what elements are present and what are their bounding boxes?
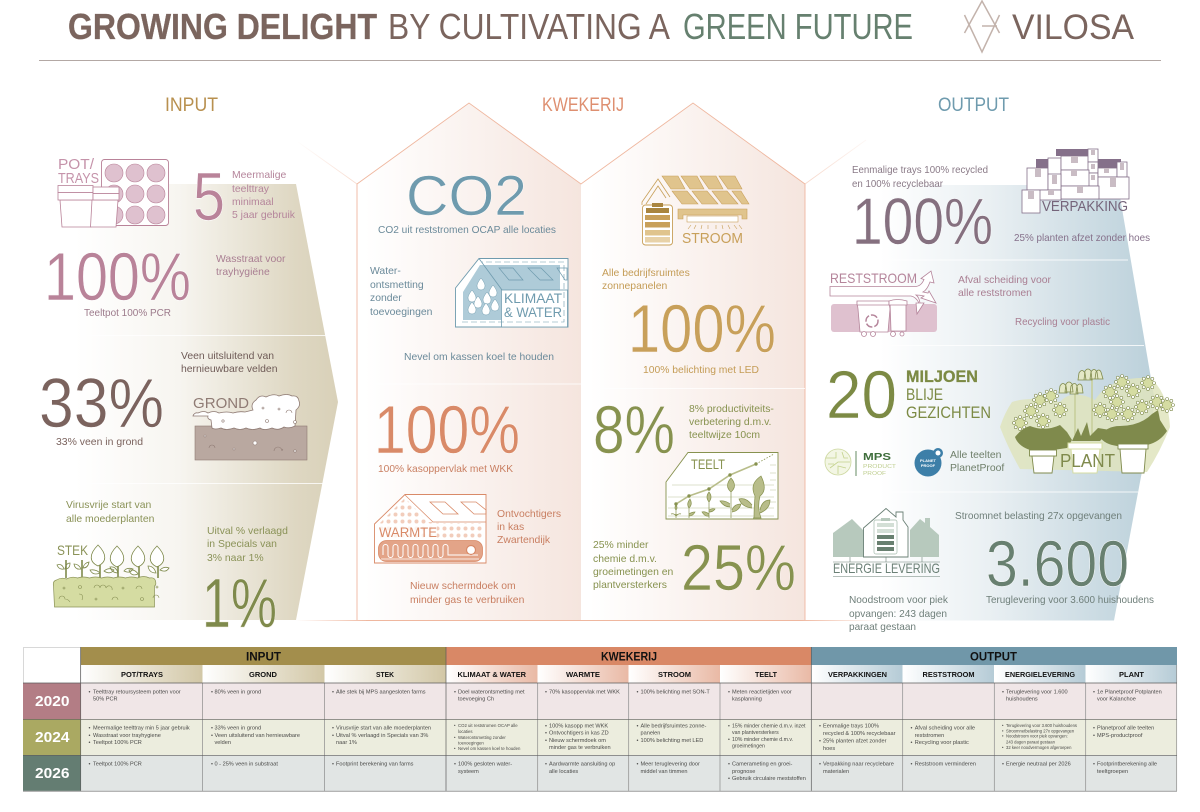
- cells: 2020: Doel waterontsmetting met: [458, 690, 525, 696]
- icon: verpakking: VERPAKKING: [1042, 199, 1128, 215]
- icon: reststroom: [830, 270, 937, 336]
- column headers: VERPAKKINGEN: [828, 670, 887, 679]
- cells: 2024: [88, 723, 1154, 752]
- text: meermalige teelttray: Meermalige: [232, 170, 287, 181]
- text: kasoppervlak: 100% kasoppervlak met WKK: [378, 464, 513, 475]
- cells: 2026: Verpakking naar recyclebare: [823, 762, 894, 768]
- cells: 2026: Footprintberekening alle: [1097, 762, 1157, 768]
- cells: 2026: teeltgroepen: [1097, 769, 1128, 775]
- cells: 2020: 80% veen in grond: [214, 690, 261, 696]
- cells: 2026: Reststroom verminderen: [915, 762, 976, 768]
- cells: 2024: CO2 uit reststromen OCAP alle: [458, 723, 518, 728]
- header: kwekerij: KWEKERIJ: [601, 652, 657, 664]
- cells: 2024: Stroomnetbelasting 27x opgevangen: [1006, 728, 1075, 733]
- cells: 2026: •: [1093, 762, 1095, 768]
- heading: kwekerij: KWEKERIJ: [542, 95, 624, 116]
- text: ontvochtigers: in kas: [497, 522, 524, 533]
- text: meermalige teelttray: 5 jaar gebruik: [232, 210, 296, 221]
- text: nevel: Nevel om kassen koel te houden: [404, 352, 554, 363]
- stat: 8%: 8%: [593, 392, 675, 468]
- stat: 20 miljoen blije gezichten: BLIJE: [906, 385, 943, 404]
- icon: energie levering: ENERGIE LEVERING: [833, 560, 940, 576]
- cells: 2024: 25% planten afzet zonder: [823, 738, 887, 744]
- table corner cell: [24, 648, 80, 684]
- text: virusvrije start: Virusvrije start van: [66, 500, 151, 511]
- header: kwekerij: [446, 647, 812, 665]
- cells: 2020: •: [545, 690, 547, 696]
- cells: 2024: 33% veen in grond: [214, 726, 261, 732]
- text: meermalige teelttray: teelttray: [232, 184, 270, 195]
- cells: 2026: Energie neutraal per 2026: [1006, 762, 1071, 768]
- text: eenmalige trays: en 100% recyclebaar: [852, 179, 943, 190]
- cells: 2024: •: [454, 723, 456, 728]
- cells: 2024: •: [819, 723, 821, 729]
- panel: kwekerij greenhouses background: [296, 103, 880, 621]
- cells: 2024: •: [1093, 733, 1095, 739]
- cells: 2024: •: [1002, 723, 1004, 728]
- cells: 2024: •: [88, 740, 90, 746]
- cells: 2024: •: [819, 738, 821, 744]
- text: ontvochtigers: Zwartendijk: [497, 535, 551, 546]
- cells: 2026: •: [211, 762, 213, 768]
- cells: 2024: locaties: [458, 729, 473, 734]
- stat: 20 miljoen blije gezichten: [826, 357, 991, 433]
- cells: 2026: •: [728, 776, 730, 782]
- cells: 2024: Wasstraat voor trayhygiene: [93, 733, 161, 739]
- cells: 2024: •: [636, 738, 638, 744]
- header: output: OUTPUT: [970, 652, 1017, 664]
- cells: 2020: voor Kalanchoe: [1097, 697, 1136, 703]
- cells: 2026: middel van timmen: [640, 769, 687, 775]
- cells: 2024: minder gas te verbruiken: [549, 745, 611, 751]
- icon: klimaat en water: KLIMAAT: [504, 290, 562, 306]
- cells: 2024: Teruglevering voor 3.600 huishoudens: [1006, 723, 1077, 728]
- text: noodstroom: paraat gestaan: [849, 622, 916, 633]
- cells: 2024: 15% minder chemie d.m.v. inzet: [732, 723, 806, 729]
- logo: Vilosa: [964, 1, 1135, 52]
- icon: warmte: [374, 494, 486, 563]
- cells: 2026: Teeltpot 100% PCR: [93, 762, 142, 768]
- cells: 2024: Afval scheiding voor alle: [915, 726, 975, 732]
- table: roadmap: [23, 647, 1177, 791]
- cells: 2024: •: [332, 733, 334, 739]
- text: veen uitsluitend: Veen uitsluitend van: [181, 351, 274, 362]
- cells: 2026: •: [332, 762, 334, 768]
- cells: 2024: •: [1093, 726, 1095, 732]
- cells: 2026: Meer teruglevering door: [640, 762, 700, 768]
- text: noodstroom: Noodstroom voor piek: [849, 595, 949, 606]
- text: eenmalige trays: Eenmalige trays 100% recycled: [852, 165, 988, 176]
- cells: 2024: Uitval % verlaagd in Specials van 3%: [336, 733, 428, 739]
- icon: pot and trays: TRAYS: [58, 170, 99, 187]
- heading: output: OUTPUT: [938, 95, 1009, 116]
- text: waterontsmetting: zonder: [370, 293, 402, 304]
- cells: 2026: 0 - 25% veen in substraat: [214, 762, 278, 768]
- stat: 33%: 33%: [39, 364, 164, 442]
- cells: 2024: •: [545, 738, 547, 744]
- text: belichting: 100% belichting met LED: [643, 365, 759, 376]
- column headers: STROOM: [658, 670, 691, 679]
- stat: 100% belichting: 100%: [628, 291, 776, 367]
- icon: teelt: [666, 452, 778, 519]
- icon: grond: GROND: [193, 395, 249, 412]
- column headers: ENERGIELEVERING: [1005, 670, 1075, 679]
- text: chemie: groeimetingen en: [593, 567, 674, 578]
- cells: 2020: 1e Planetproof Potplanten: [1097, 690, 1162, 696]
- cells: 2024: Waterontsmetting zonder: [458, 735, 506, 740]
- text: co2 uit reststromen: CO2 uit reststromen OCAP alle locaties: [378, 225, 556, 236]
- text: noodstroom: opvangen: 243 dagen: [849, 609, 947, 620]
- stat: 100% teeltpot: 100%: [44, 239, 191, 315]
- stat: 1%: 1%: [202, 564, 277, 642]
- text: eenmalige trays: [852, 165, 988, 190]
- text: alle teelten: PlanetProof: [950, 463, 1004, 474]
- cells: 2024: reststromen: [915, 733, 944, 739]
- cells: 2026: •: [910, 762, 912, 768]
- cells: 2020: •: [454, 690, 456, 696]
- header: output: [812, 647, 1177, 665]
- text: ontvochtigers: Ontvochtigers: [497, 509, 561, 520]
- cells: 2024: Ontvochtigers in kas ZD: [549, 730, 609, 736]
- text: virusvrije start: alle moederplanten: [66, 514, 155, 525]
- text: noodstroom: [849, 595, 949, 633]
- cells: 2026: •: [454, 762, 456, 768]
- cells: 2020: •: [211, 690, 213, 696]
- cells: 2020: kasplanning: [732, 697, 762, 703]
- cells: 2026: alle locaties: [549, 769, 578, 775]
- text: waterontsmetting: toevoegingen: [370, 307, 433, 318]
- logo: planetproof: PLANET: [920, 458, 937, 463]
- cells: 2024: •: [636, 724, 638, 730]
- stat: 20 miljoen blije gezichten: MILJOEN: [906, 368, 978, 386]
- icon: energie levering: [833, 508, 940, 576]
- cells: 2026: Footprint berekening van farms: [336, 762, 414, 768]
- text: chemie: chemie d.m.v.: [593, 554, 657, 565]
- icon: stek: [53, 542, 169, 607]
- text: chemie: 25% minder: [593, 540, 649, 551]
- cells: 2024: naar 1%: [336, 740, 357, 746]
- cells: 2020: Meten reactietijden voor: [732, 690, 792, 696]
- cells: 2026: Camerameting en groei-: [732, 762, 792, 768]
- text: schermdoek: minder gas te verbruiken: [410, 595, 525, 606]
- text: teeltpot: Teeltpot 100% PCR: [84, 308, 171, 319]
- text: uitval: 3% naar 1%: [207, 553, 264, 564]
- column headers: STEK: [376, 670, 395, 679]
- stat: 5: 5: [193, 159, 225, 235]
- cells: 2024: •: [88, 733, 90, 739]
- cells: 2020: Teruglevering voor 1.600: [1006, 690, 1068, 696]
- cells: 2026: 100% gesloten water-: [458, 762, 512, 768]
- cells: 2024: recycled & 100% recyclebaar: [823, 731, 896, 737]
- column headers: TEELT: [755, 670, 778, 679]
- icon: reststroom: RESTSTROOM: [830, 270, 917, 286]
- text: chemie: plantversterkers: [593, 580, 667, 591]
- cells: 2020: Teelttray retoursysteem potten voor: [93, 690, 181, 696]
- cells: 2026: •: [728, 762, 730, 768]
- text: stroomnet: Stroomnet belasting 27x opgevangen: [955, 511, 1122, 522]
- cells: 2020: 100% belichting met SON-T: [640, 690, 710, 696]
- cells: 2024: hoes: [823, 746, 835, 752]
- column headers: RESTSTROOM: [922, 670, 975, 679]
- icon: klimaat en water: & WATER: [504, 304, 562, 320]
- text: wasstraat: trayhygiëne: [216, 267, 270, 278]
- cells: 2024: Virusvrije start van alle moederplanten: [336, 726, 431, 732]
- panel: output arrow background: [850, 185, 1155, 620]
- cells: 2024: •: [910, 726, 912, 732]
- cells: 2024: van plantversterkers: [732, 730, 779, 736]
- text: bedrijfsruimtes: Alle bedrijfsruimtes: [602, 268, 690, 279]
- cells: 2026: •: [88, 762, 90, 768]
- cells: 2024: velden: [214, 740, 231, 746]
- cells: 2020: huishoudens: [1006, 697, 1038, 703]
- cells: 2020: Alle stek bij MPS aangesloten farms: [336, 690, 426, 696]
- text: wasstraat: Wasstraat voor: [216, 254, 286, 265]
- icon: pot and trays: [58, 156, 168, 227]
- text: meermalige teelttray: minimaal: [232, 197, 274, 208]
- cells: 2024: 243 dagen paraat gestaan: [1006, 740, 1056, 744]
- stat: 3.600: 3.600: [986, 527, 1129, 600]
- logo: MPS product proof: MPS: [863, 452, 891, 463]
- row 2020: 2020: [35, 694, 70, 710]
- cells: 2020: •: [636, 690, 638, 696]
- cells: 2026: •: [1002, 762, 1004, 768]
- icon: klimaat en water: [456, 258, 568, 327]
- title: GREEN FUTURE: [683, 6, 913, 47]
- cells: 2020: 50% PCR: [93, 697, 118, 703]
- stat: 25%: 25%: [681, 531, 796, 604]
- icon: plant: [1000, 369, 1173, 473]
- stat: CO2: CO2: [406, 164, 527, 228]
- text: schermdoek: Nieuw schermdoek om: [410, 581, 516, 592]
- cells: 2020: •: [728, 690, 730, 696]
- icon: verpakking: [1022, 149, 1129, 215]
- text: afval scheiding: alle reststromen: [958, 288, 1032, 299]
- text: productiviteit: teeltwijze 10cm: [689, 430, 760, 441]
- cells: 2024: •: [545, 724, 547, 730]
- cells: 2024: Alle bedrijfsruimtes zonne-: [640, 724, 707, 730]
- cells: 2020: •: [1093, 690, 1095, 696]
- column headers: PLANT: [1119, 670, 1145, 679]
- stat: 100% kasoppervlak: 100%: [374, 392, 520, 468]
- column headers: GROND: [249, 670, 277, 679]
- icon: plant: PLANT: [1060, 451, 1115, 471]
- cells: 2024: toevoegingen: [458, 741, 484, 746]
- cells: 2024: Teeltpot 100% PCR: [93, 740, 142, 746]
- cells: 2026: materialen: [823, 769, 849, 775]
- panel: input arrow background: [60, 184, 338, 620]
- logo: MPS product proof: PRODUCT: [863, 464, 897, 470]
- stat: 20 miljoen blije gezichten: GEZICHTEN: [906, 403, 991, 422]
- cells: 2026: Aardwarmte aansluiting op: [549, 762, 615, 768]
- cells: 2024: Meermalige teelttray min 5 jaar gebruik: [93, 726, 190, 732]
- cells: 2024: •: [454, 735, 456, 740]
- row 2020: [23, 683, 1177, 719]
- text: teruglevering: Teruglevering voor 3.600 huishoudens: [986, 595, 1154, 606]
- text: afval scheiding: Afval scheiding voor: [958, 275, 1052, 286]
- column headers: KLIMAAT & WATER: [458, 670, 527, 679]
- row 2024: [23, 719, 1177, 755]
- cells: 2026: •: [819, 762, 821, 768]
- text: waterontsmetting: ontsmetting: [370, 280, 424, 291]
- title: BY CULTIVATING A: [388, 6, 670, 47]
- cells: 2020: •: [88, 690, 90, 696]
- cells: 2024: 10% minder chemie d.m.v.: [732, 737, 793, 743]
- cells: 2026: [88, 762, 1157, 782]
- text: bedrijfsruimtes: zonnepanelen: [602, 281, 668, 292]
- cells: 2020: [88, 690, 1162, 703]
- cells: 2024: Recycling voor plastic: [915, 740, 969, 746]
- cells: 2024: groeimetingen: [732, 744, 765, 750]
- cells: 2024: •: [728, 737, 730, 743]
- stat: 100% trays: 100%: [852, 184, 993, 258]
- cells: 2024: •: [88, 726, 90, 732]
- cells: 2026: •: [545, 762, 547, 768]
- cells: 2026: systeem: [458, 769, 479, 775]
- cells: 2024: Eenmalige trays 100%: [823, 723, 879, 729]
- cells: 2024: •: [1002, 734, 1004, 739]
- icon: warmte: WARMTE: [379, 524, 437, 540]
- icon: teelt: TEELT: [691, 456, 725, 472]
- icon: grond: [193, 394, 307, 460]
- cells: 2024: •: [211, 726, 213, 732]
- cells: 2020: 70% kasoppervlak met WKK: [549, 690, 620, 696]
- cells: 2024: •: [454, 746, 456, 751]
- title: GROWING DELIGHT: [68, 6, 377, 47]
- cells: 2024: Nevel om kassen koel te houden: [458, 746, 521, 751]
- cells: 2024: 100% kasopp met WKK: [549, 724, 608, 730]
- icon: stroom: STROOM: [682, 230, 743, 247]
- text: waterontsmetting: Water-: [370, 266, 401, 277]
- cells: 2026: •: [636, 762, 638, 768]
- row 2026: 2026: [35, 766, 70, 782]
- icon: stek: STEK: [57, 542, 89, 558]
- cells: 2024: panelen: [640, 730, 660, 736]
- text: uitval: in Specials van: [207, 539, 277, 550]
- cells: 2026: prognose: [732, 769, 755, 775]
- text: veen uitsluitend: hernieuwbare velden: [181, 364, 278, 375]
- cells: 2024: 100% belichting met LED: [640, 738, 703, 744]
- icon: stroom: [642, 176, 749, 247]
- cells: 2024: Planetproof alle teelten: [1097, 726, 1154, 732]
- logo: planetproof: [914, 448, 943, 476]
- column headers: WARMTE: [566, 670, 600, 679]
- heading: input: INPUT: [165, 95, 218, 116]
- row 2026: [23, 755, 1177, 791]
- title: [68, 6, 913, 47]
- cells: 2024: Veen uitsluitend van hernieuwbare: [214, 733, 300, 739]
- cells: 2020: toevoeging Ch: [458, 697, 494, 703]
- cells: 2024: MPS-productproof: [1097, 733, 1143, 739]
- cells: 2024: •: [728, 723, 730, 729]
- row 2024: 2024: [35, 730, 70, 746]
- text: productiviteit: 8% productiviteits-: [689, 404, 774, 415]
- cells: 2024: •: [910, 740, 912, 746]
- icon: pot and trays: POT/: [58, 156, 95, 173]
- header: input: INPUT: [246, 652, 281, 664]
- cells: 2024: 32 keer noodvermogen afgeroepen: [1006, 745, 1072, 750]
- text: recycling: Recycling voor plastic: [1015, 317, 1110, 328]
- text: alle teelten: Alle teelten: [950, 450, 1002, 461]
- text: uitval: Uitval % verlaagd: [207, 526, 288, 537]
- text: productiviteit: verbetering d.m.v.: [689, 417, 771, 428]
- cells: 2024: •: [332, 726, 334, 732]
- cells: 2024: Nieuw schermdoek om: [549, 738, 606, 744]
- stat: 20 miljoen blije gezichten: 20: [826, 357, 897, 433]
- cells: 2024: Noodstroom voor piek opvangen:: [1006, 734, 1068, 739]
- column headers: [81, 665, 1177, 683]
- cells: 2026: Gebruik circulaire meststoffen: [732, 776, 806, 782]
- cells: 2024: •: [211, 733, 213, 739]
- column headers: POT/TRAYS: [121, 670, 163, 679]
- header: input: [80, 647, 446, 665]
- logo: MPS product proof: [825, 449, 897, 477]
- logo: planetproof: PROOF: [921, 463, 936, 468]
- cells: 2024: •: [1002, 728, 1004, 733]
- text: planten afzet: 25% planten afzet zonder hoes: [1014, 233, 1150, 244]
- logo: MPS product proof: PROOF: [863, 471, 886, 477]
- text: 33% veen: 33% veen in grond: [56, 437, 143, 448]
- logo: Vilosa: VILOSA: [1012, 8, 1135, 47]
- cells: 2024: •: [545, 730, 547, 736]
- cells: 2024: •: [1002, 745, 1004, 750]
- cells: 2020: •: [1002, 690, 1004, 696]
- cells: 2020: •: [332, 690, 334, 696]
